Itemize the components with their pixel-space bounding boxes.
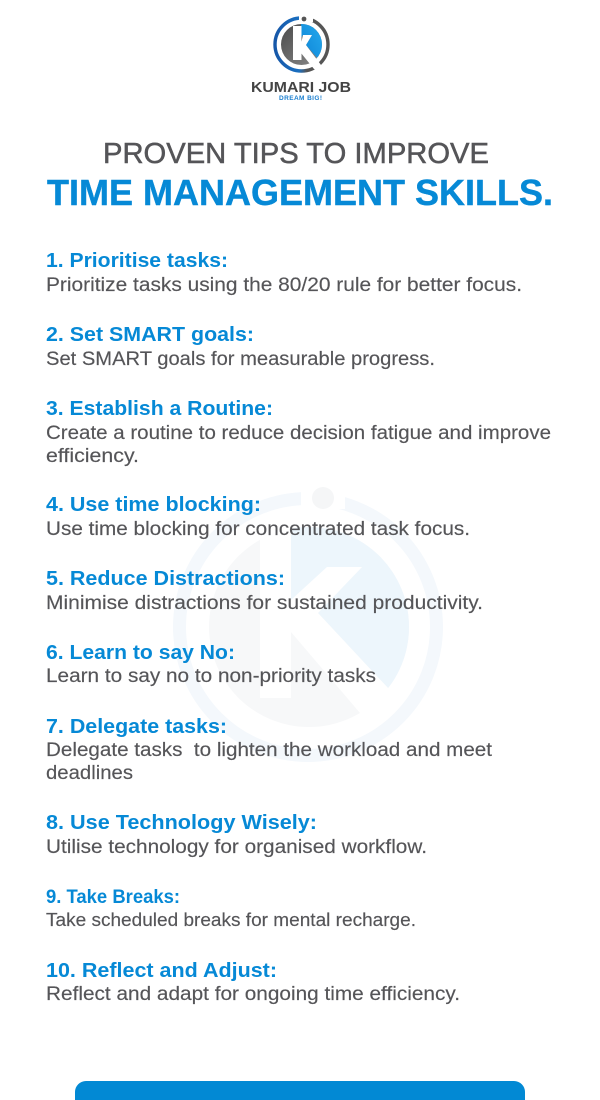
tip 9: Take scheduled breaks for mental recharge. [46, 909, 416, 930]
tip 10 [46, 960, 460, 1005]
tip 4: Use time blocking for concentrated task focus. [46, 519, 470, 540]
tip 7 [46, 716, 493, 784]
tip 6: Learn to say no to non-priority tasks [46, 666, 376, 687]
tip 6: 6. Learn to say No: [46, 642, 235, 664]
background watermark logo [180, 485, 436, 756]
tip 2: Set SMART goals for measurable progress. [46, 349, 435, 370]
tip 8: 8. Use Technology Wisely: [46, 812, 317, 834]
tip 1: 1. Prioritise tasks: [46, 250, 228, 272]
logo wordmark: KUMARI JOB [251, 79, 351, 96]
tip 9: 9. Take Breaks: [46, 887, 180, 908]
tip 2 [46, 324, 435, 370]
tip 10: 10. Reflect and Adjust: [46, 960, 277, 982]
tip 3: 3. Establish a Routine: [46, 398, 273, 420]
tip 7: Delegate tasks to lighten the workload and meet [46, 740, 493, 761]
tip 5 [46, 568, 483, 614]
logo tagline: DREAM BIG! [279, 95, 322, 102]
tip 8: Utilise technology for organised workflow. [46, 837, 427, 858]
tip 3: Create a routine to reduce decision fatigue and improve [46, 423, 551, 444]
title line 2: TIME MANAGEMENT SKILLS. [47, 172, 553, 213]
tip 7: 7. Delegate tasks: [46, 716, 227, 738]
tip 7: deadlines [46, 763, 133, 784]
title line 1: PROVEN TIPS TO IMPROVE [103, 138, 489, 170]
tip 1 [46, 250, 522, 296]
title [47, 138, 553, 213]
tip 6 [46, 642, 376, 687]
tip 3: efficiency. [46, 446, 139, 467]
logo [251, 13, 351, 102]
tip 1: Prioritize tasks using the 80/20 rule for better focus. [46, 275, 522, 296]
tip 4: 4. Use time blocking: [46, 494, 261, 516]
tip 5: Minimise distractions for sustained productivity. [46, 593, 483, 614]
tip 2: 2. Set SMART goals: [46, 324, 254, 346]
tip 10: Reflect and adapt for ongoing time efficiency. [46, 984, 460, 1005]
tip 9 [46, 887, 416, 930]
tip 3 [46, 398, 551, 467]
tip 5: 5. Reduce Distractions: [46, 568, 285, 590]
logo icon [275, 13, 328, 71]
tip 4 [46, 494, 470, 540]
tip 8 [46, 812, 427, 858]
bottom blue button [75, 1081, 525, 1100]
